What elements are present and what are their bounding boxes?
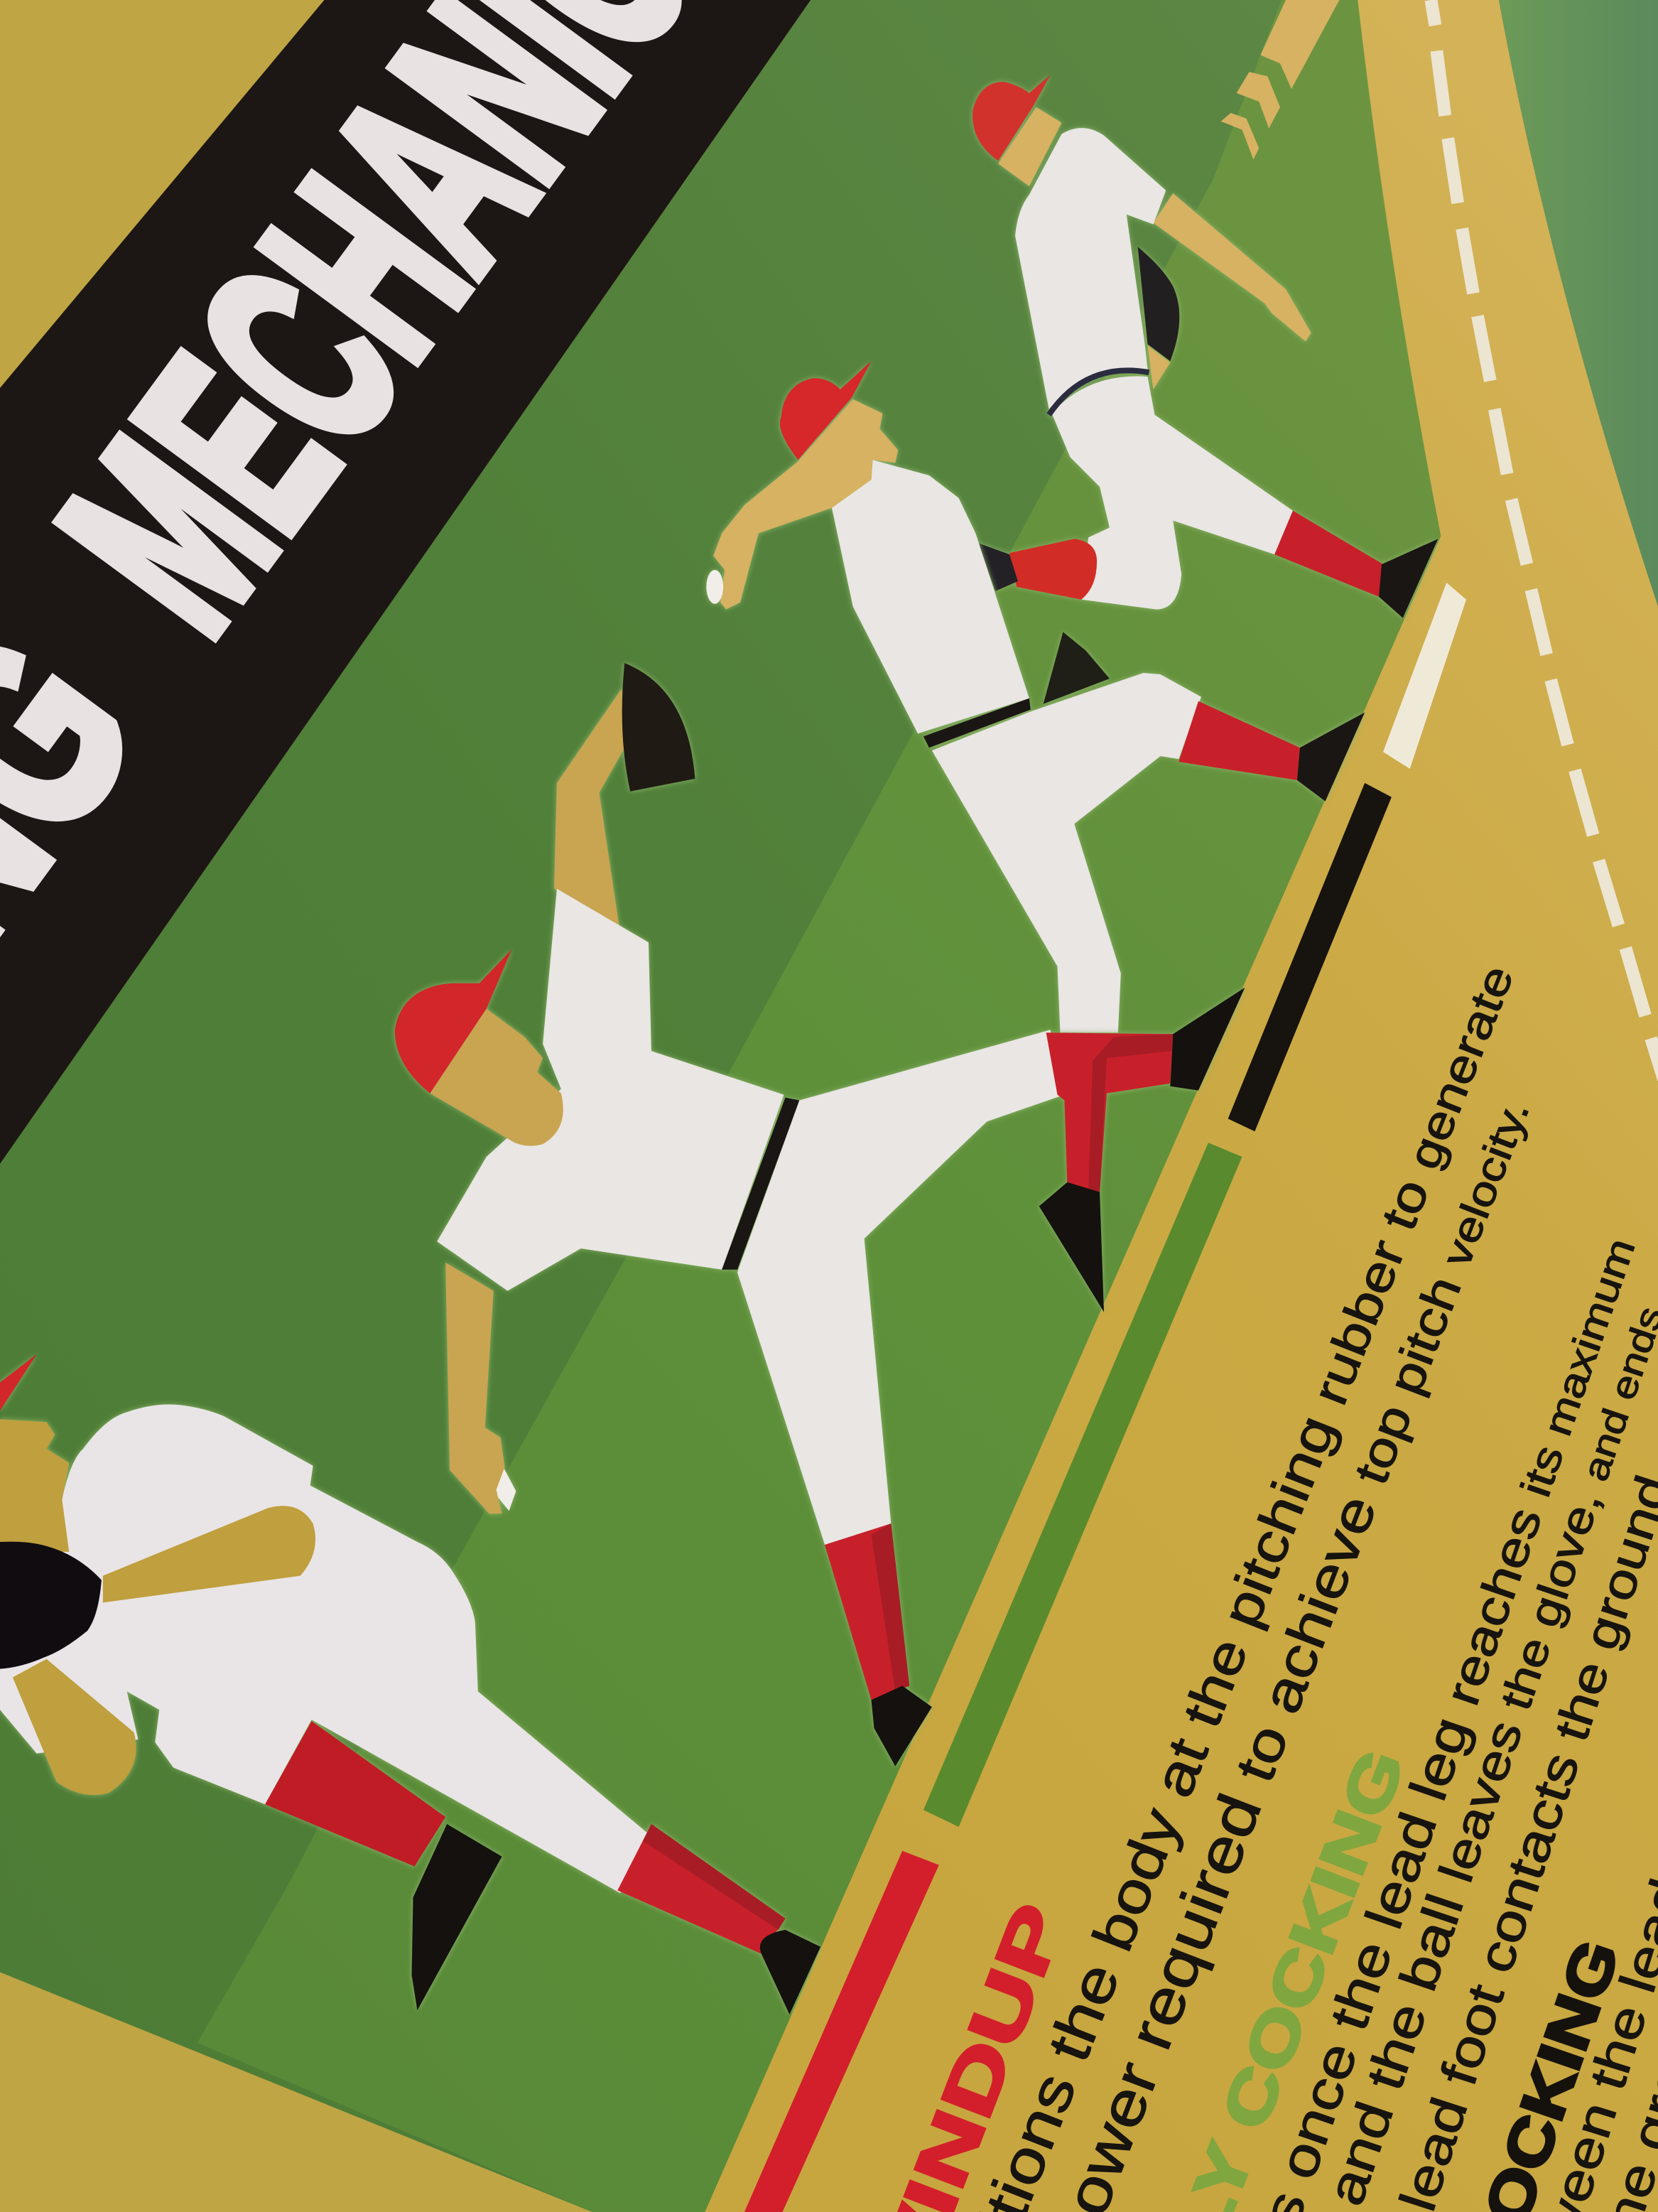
lower forearm — [13, 1659, 136, 1795]
shoe — [1297, 713, 1365, 802]
sock — [1274, 511, 1383, 597]
bar: green early cocking — [923, 1143, 1242, 1827]
hand behind — [1148, 345, 1170, 389]
front shoe — [760, 1930, 820, 2014]
cap — [972, 75, 1051, 161]
raised arm — [554, 689, 624, 934]
colour bars — [744, 583, 1466, 2212]
bar: black late cocking — [1228, 783, 1392, 1131]
arm and head — [713, 399, 898, 610]
front shoe — [1170, 988, 1245, 1091]
pants — [932, 673, 1201, 1032]
cap tip — [0, 1354, 37, 1410]
front sock — [617, 1824, 785, 1954]
cap — [395, 949, 511, 1094]
long sock — [825, 1523, 909, 1700]
jersey — [437, 889, 784, 1291]
bar: red windup — [744, 1851, 939, 2212]
icon: speed chevrons — [1221, 0, 1339, 159]
head — [430, 1009, 563, 1146]
cap — [780, 361, 872, 460]
hair — [0, 1419, 69, 1552]
jersey — [1015, 128, 1166, 409]
sock shade — [872, 1523, 909, 1691]
belt — [722, 1098, 799, 1270]
knee sock — [1046, 1032, 1173, 1192]
rear shoe — [978, 543, 1018, 591]
figure: pitcher 2, main pose — [395, 663, 1245, 1766]
dashed line — [1431, 0, 1658, 1079]
belt — [923, 698, 1031, 748]
down shoe — [1039, 1182, 1104, 1312]
lower arm — [445, 1263, 505, 1514]
text: late cocking description line 2 — [1588, 1959, 1658, 2212]
figure: pitcher 1, windup — [0, 1354, 820, 2014]
head — [998, 107, 1061, 186]
glove — [0, 1542, 102, 1669]
figure: pitcher 4, stride — [972, 75, 1438, 618]
body — [0, 1405, 649, 1893]
panel: title band — [0, 0, 811, 1494]
glove — [622, 663, 695, 792]
upper forearm — [103, 1506, 315, 1602]
pants — [737, 1030, 1060, 1545]
figure: pitcher 3, leg lift — [706, 361, 1365, 1032]
pants — [1052, 377, 1293, 610]
glove behind — [1138, 247, 1179, 361]
shoe — [1379, 539, 1438, 618]
knee sock shade — [1088, 1034, 1173, 1192]
bar: white follow-through — [1383, 583, 1466, 769]
shoe — [872, 1685, 932, 1766]
text: late cocking description line 1 — [1503, 1872, 1658, 2212]
panel: gold base path and text panel — [705, 0, 1658, 2212]
ball — [491, 1467, 516, 1511]
sock — [265, 1721, 445, 1867]
shoe — [412, 1824, 502, 2010]
rear sock — [1009, 539, 1097, 600]
panel: top right green corner — [1499, 0, 1658, 607]
front sock shade — [643, 1824, 785, 1930]
belt — [1049, 370, 1149, 415]
forward arm — [1153, 193, 1311, 341]
text panel: phases — [852, 954, 1658, 2212]
jersey — [832, 460, 1029, 733]
title — [0, 0, 805, 1494]
sock — [1179, 701, 1300, 780]
ball — [706, 570, 723, 604]
glove — [1044, 632, 1110, 704]
